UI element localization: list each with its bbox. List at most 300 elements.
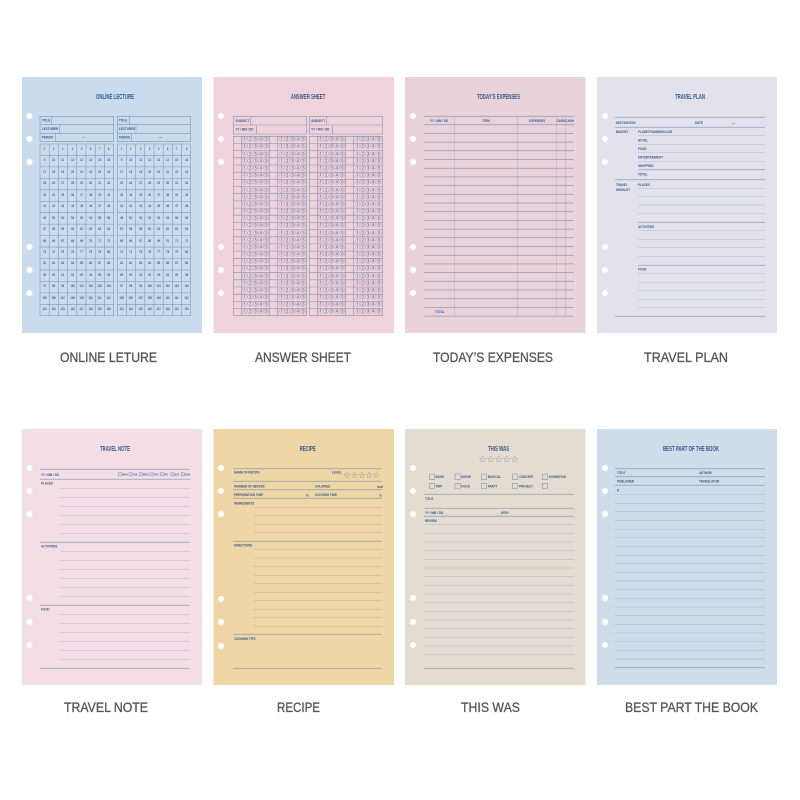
lecture grid: right: 90 <box>130 273 133 277</box>
lecture grid: right: 64 <box>185 227 188 231</box>
lecture grid: right: 29 <box>157 181 160 185</box>
lecture grid: right: 37 <box>157 193 160 197</box>
lecture grid: right: 51 <box>139 216 142 220</box>
answer bubbles: column 2 <box>279 136 307 316</box>
lecture grid: left: 107 <box>61 296 65 300</box>
lecture grid: right: 93 <box>157 273 160 277</box>
lecture grid: left: 5 <box>81 147 82 151</box>
lecture grid: left: 103 <box>98 284 102 288</box>
answer bubbles: column 3: ①②③④⑤ <box>318 193 345 201</box>
lecture grid: left: 2 <box>53 147 55 151</box>
lecture grid: left: 115 <box>61 307 65 311</box>
lecture grid: right: 26 <box>130 181 133 185</box>
answer bubbles: column 3: ①②③④⑤ <box>318 186 345 194</box>
answer bubbles: column 3: ①②③④⑤ <box>318 171 345 179</box>
lecture grid: left: 100 <box>70 284 74 288</box>
answer bubbles: column 1: ①②③④⑤ <box>242 307 269 315</box>
answer bubbles: column 4: ①②③④⑤ <box>355 286 382 294</box>
answer bubbles: column 1 <box>242 136 270 316</box>
plan labels: PLACES <box>638 182 651 187</box>
lecture grid: right <box>117 144 191 316</box>
lecture grid: right: 96 <box>185 273 188 277</box>
answer bubbles: column 2: ①②③④⑤ <box>279 207 306 215</box>
lecture grid: left: 93 <box>80 273 83 277</box>
lecture grid: right: 112 <box>184 296 188 300</box>
note labels <box>41 473 60 612</box>
answer bubbles: column 3: ①②③④⑤ <box>318 221 345 229</box>
lecture grid: right: 92 <box>148 273 151 277</box>
recipe labels: COOKING TIPS <box>234 637 256 641</box>
lecture grid: left: 80 <box>107 250 110 254</box>
lecture grid: left: 6 <box>90 147 91 151</box>
review labels: YY / MM / DD <box>425 511 444 515</box>
expense table <box>424 116 574 316</box>
recipe labels: PREPARATION TIME <box>234 493 264 497</box>
weekday checkboxes: TUE <box>133 472 138 477</box>
answer bubbles: column 2: ①②③④⑤ <box>279 229 306 237</box>
lecture grid: left: 17 <box>43 170 46 174</box>
recipe labels: CALORIES <box>315 484 331 489</box>
lecture grid: left: 25 <box>43 181 46 185</box>
lecture grid: left: 37 <box>80 193 83 197</box>
lecture grid: left: 55 <box>98 216 101 220</box>
panel: recipe <box>214 429 394 685</box>
answer bubbles: column 4: ①②③④⑤ <box>355 229 382 237</box>
plan labels: WISHLIST <box>616 188 630 192</box>
form header: right: — <box>159 135 163 140</box>
lecture grid: left: 53 <box>80 216 83 220</box>
lecture grid: right: 16 <box>185 158 188 162</box>
book labels: TITLE <box>617 471 626 475</box>
lecture grid: left: 75 <box>61 250 64 254</box>
answer bubbles: column 1: ①②③④⑤ <box>242 279 269 287</box>
lecture grid: right: 8 <box>185 147 187 151</box>
answer bubbles: column 2: ①②③④⑤ <box>279 164 306 172</box>
lecture grid: left: 26 <box>52 181 55 185</box>
lecture grid: left: 3 <box>62 147 64 151</box>
form header: left <box>40 116 114 141</box>
lecture grid: left: 34 <box>52 193 55 197</box>
caption: best part the book: BEST PART THE BOOK <box>625 700 758 715</box>
lecture grid: left: 108 <box>70 296 74 300</box>
category checkboxes: CONCERT <box>519 475 534 479</box>
answer bubbles: column 2: ①②③④⑤ <box>279 272 306 280</box>
lecture grid: left: 49 <box>43 216 46 220</box>
book labels: P. <box>617 488 620 493</box>
caption: today's expenses: TODAY’S EXPENSES <box>433 350 553 365</box>
answer bubbles: column 3: ①②③④⑤ <box>318 272 345 280</box>
form header: right: PERIOD <box>119 135 131 140</box>
lecture grid: right: 89 <box>120 273 123 277</box>
lecture grid: left: 109 <box>79 296 84 300</box>
lecture grid: left: 18 <box>52 170 55 174</box>
lecture grid: left: 106 <box>52 296 56 300</box>
plan labels: TOTAL <box>638 172 648 177</box>
review labels: TITLE <box>425 497 434 501</box>
lecture grid: left: 29 <box>80 181 83 185</box>
lecture grid: left: 33 <box>43 193 46 197</box>
panel: today's expenses <box>405 77 586 333</box>
answer bubbles: column 4: ①②③④⑤ <box>355 207 382 215</box>
lecture grid: right: 7 <box>176 147 178 151</box>
lecture grid: right: 101 <box>156 284 161 288</box>
note lines <box>40 469 190 668</box>
answer bubbles: column 4: ①②③④⑤ <box>355 157 382 165</box>
recipe labels: DIRECTIONS <box>234 543 253 548</box>
lecture grid: right: 72 <box>185 238 188 242</box>
lecture grid: left: 111 <box>98 296 102 300</box>
answer bubbles: column 1: ①②③④⑤ <box>242 178 269 186</box>
book labels: TRANSLATOR <box>699 479 720 484</box>
recipe labels: kcal <box>377 485 383 489</box>
heading: answer sheet: ANSWER SHEET <box>291 92 326 101</box>
panel: best part of the book <box>597 429 777 685</box>
lecture grid: left: 61 <box>80 227 83 231</box>
heading: travel note: TRAVEL NOTE <box>100 444 130 453</box>
lecture grid: left: 70 <box>89 238 92 242</box>
lecture grid: left <box>40 144 114 316</box>
category checkboxes: FOOD <box>461 484 470 489</box>
answer bubbles: column 1: ①②③④⑤ <box>242 221 269 229</box>
lecture grid: left: 113 <box>42 307 47 311</box>
answer bubbles: column 4: ①②③④⑤ <box>355 279 382 287</box>
weekday checkboxes: SUN <box>185 472 190 477</box>
plan labels: HOTEL <box>638 138 648 143</box>
lecture grid: right: 54 <box>166 216 169 220</box>
lecture grid: left: 110 <box>88 296 93 300</box>
panel: travel note <box>22 429 202 685</box>
answer bubbles: column 4: ①②③④⑤ <box>355 236 382 244</box>
lecture grid: right: 63 <box>176 227 178 231</box>
answer bubbles: column 1: ①②③④⑤ <box>242 257 269 265</box>
lecture grid: left: 21 <box>80 170 83 174</box>
lecture grid: left: 22 <box>89 170 92 174</box>
recipe labels: NAME OF RECIPE <box>234 470 260 475</box>
answer bubbles: column 2: ①②③④⑤ <box>279 200 306 208</box>
lecture grid: left: 92 <box>71 273 74 277</box>
lecture grid: left: 7 <box>99 147 100 151</box>
form header: subject and date <box>234 116 383 134</box>
lecture grid: left: 44 <box>71 204 74 208</box>
answer bubbles: column 3: ①②③④⑤ <box>318 207 345 215</box>
lecture grid: right: 117 <box>157 307 161 311</box>
plan labels: PLANE/TRAIN/BUS/CAR <box>638 130 673 134</box>
lecture grid: left: 16 <box>107 158 110 162</box>
answer bubbles: column 4: ①②③④⑤ <box>355 178 382 186</box>
lecture grid: right: 1 <box>121 147 123 151</box>
lecture grid: right: 45 <box>157 204 160 208</box>
category checkboxes <box>429 474 566 489</box>
expense table: YY / MM / DD <box>430 118 449 123</box>
category checkboxes: MUSICAL <box>488 475 501 479</box>
note labels: FOOD <box>41 607 50 612</box>
caption: recipe: RECIPE <box>277 700 320 715</box>
panel: travel plan <box>597 77 777 333</box>
lecture grid: left: 118 <box>88 307 93 311</box>
lecture grid: left: 58 <box>52 227 55 231</box>
lecture grid: right: 109 <box>156 296 161 300</box>
recipe labels <box>234 470 383 641</box>
lecture grid: left: 19 <box>61 170 64 174</box>
lecture grid: left: 72 <box>107 238 110 242</box>
lecture grid: right: 49 <box>120 216 123 220</box>
answer bubbles: column 3: ①②③④⑤ <box>318 300 345 308</box>
lecture grid: right: 14 <box>166 158 169 162</box>
caption: online leture: ONLINE LETURE <box>60 350 157 365</box>
lecture grid: right: 50 <box>130 216 133 220</box>
form header: right <box>117 116 191 141</box>
lecture grid: left: 60 <box>71 227 74 231</box>
lecture grid: left: 50 <box>52 216 55 220</box>
answer bubbles: column 2: ①②③④⑤ <box>279 236 306 244</box>
lecture grid: left: 30 <box>89 181 92 185</box>
lecture grid: right: 68 <box>148 238 151 242</box>
plan labels: BUDGET <box>616 130 628 134</box>
lecture grid: right: 80 <box>185 250 188 254</box>
answer bubbles: column 3: ①②③④⑤ <box>318 178 345 186</box>
category checkboxes: PARTY <box>488 484 498 489</box>
answer bubbles: column 2: ①②③④⑤ <box>279 264 306 272</box>
lecture grid: left: 56 <box>107 216 110 220</box>
answer bubbles: column 1: ①②③④⑤ <box>242 229 269 237</box>
answer bubbles: column 4: ①②③④⑤ <box>355 193 382 201</box>
lecture grid: right: 27 <box>139 181 142 185</box>
lecture grid: right: 9 <box>121 158 123 162</box>
answer bubbles: column 3: ①②③④⑤ <box>318 307 345 315</box>
lecture grid: left: 97 <box>43 284 46 288</box>
lecture grid: right: 58 <box>130 227 133 231</box>
caption: answer sheet: ANSWER SHEET <box>255 350 351 365</box>
lecture grid: left: 120 <box>107 307 111 311</box>
lecture grid: right: 86 <box>166 261 169 265</box>
plan labels: SHOPPING <box>638 164 654 168</box>
recipe lines <box>233 469 382 668</box>
plan labels <box>616 121 736 272</box>
review labels: WITH <box>501 511 509 515</box>
panel: this was <box>405 429 586 685</box>
lecture grid: left: 14 <box>89 158 92 162</box>
lecture grid: left: 15 <box>98 158 101 162</box>
lecture grid: right: 56 <box>185 216 188 220</box>
lecture grid: right: 35 <box>139 193 142 197</box>
answer bubbles: column 2: ①②③④⑤ <box>279 142 306 150</box>
lecture grid: right: 91 <box>139 273 142 277</box>
lecture grid: right: 97 <box>120 284 123 288</box>
lecture grid: left: 28 <box>71 181 74 185</box>
answer bubbles: column 3: ①②③④⑤ <box>318 243 345 251</box>
form header: subject and date: YY / MM / DD <box>235 127 254 132</box>
answer bubbles: column 1: ①②③④⑤ <box>242 150 269 158</box>
answer bubbles: column 2: ①②③④⑤ <box>279 250 306 258</box>
lecture grid: right: 85 <box>157 261 160 265</box>
lecture grid: left: 89 <box>43 273 46 277</box>
lecture grid: left: 54 <box>89 216 92 220</box>
lecture grid: left: 86 <box>89 261 92 265</box>
answer bubbles: column 3: ①②③④⑤ <box>318 264 345 272</box>
form header: subject and date: YY / MM / DD <box>311 127 330 132</box>
lecture grid: right: 48 <box>185 204 188 208</box>
form header: left: PERIOD <box>42 135 54 140</box>
lecture grid: left: 90 <box>52 273 55 277</box>
answer bubbles: column 1: ①②③④⑤ <box>242 272 269 280</box>
plan labels: FOOD <box>638 147 647 151</box>
lecture grid: right: 3 <box>140 147 141 151</box>
answer bubbles: column 4: ①②③④⑤ <box>355 307 382 315</box>
panel: online lecture <box>22 77 202 333</box>
rating stars: ☆☆☆☆☆ <box>478 454 519 466</box>
lecture grid: right: 20 <box>148 170 151 174</box>
caption: this was: THIS WAS <box>461 700 520 715</box>
lecture grid: right: 22 <box>166 170 169 174</box>
book labels <box>617 471 720 493</box>
lecture grid: left: 96 <box>107 273 110 277</box>
expense table: ITEM <box>482 118 490 123</box>
review labels <box>425 497 509 523</box>
lecture grid: right: 4 <box>149 147 150 151</box>
answer bubbles: column 2: ①②③④⑤ <box>279 243 306 251</box>
lecture grid: right: 75 <box>139 250 142 254</box>
form header: left: LECTURER <box>42 126 59 131</box>
lecture grid: right: 113 <box>120 307 124 311</box>
lecture grid: right: 67 <box>139 238 142 242</box>
category checkboxes: MOVIE <box>461 475 471 479</box>
answer bubbles: column 2: ①②③④⑤ <box>279 257 306 265</box>
lecture grid: right: 74 <box>130 250 133 254</box>
lecture grid: left: 23 <box>98 170 101 174</box>
answer bubbles: column 3 <box>318 136 346 316</box>
lecture grid: right: 116 <box>147 307 152 311</box>
answer bubbles: column 3: ①②③④⑤ <box>318 150 345 158</box>
note labels: ACTIVITIES <box>41 544 58 549</box>
lecture grid: right: 36 <box>148 193 151 197</box>
category checkboxes: PROJECT <box>519 484 533 489</box>
answer bubbles: column 3: ①②③④⑤ <box>318 286 345 294</box>
lecture grid: right: 103 <box>175 284 179 288</box>
lecture grid: right: 99 <box>139 284 142 288</box>
level stars: ☆☆☆☆☆ <box>343 471 380 481</box>
lecture grid: left: 65 <box>43 238 46 242</box>
lecture grid: left: 104 <box>107 284 111 288</box>
answer grid lines <box>233 136 383 316</box>
lecture grid: left: 88 <box>107 261 110 265</box>
lecture grid: left: 9 <box>44 158 45 162</box>
lecture grid: left: 63 <box>98 227 101 231</box>
lecture grid: left: 39 <box>98 193 101 197</box>
answer bubbles: column 4: ①②③④⑤ <box>355 214 382 222</box>
lecture grid: right: 2 <box>130 147 132 151</box>
lecture grid: right: 39 <box>176 193 178 197</box>
lecture grid: right: 31 <box>176 181 178 185</box>
answer bubbles: column 4: ①②③④⑤ <box>355 272 382 280</box>
lecture grid: right: 34 <box>130 193 133 197</box>
lecture grid: right: 33 <box>120 193 123 197</box>
lecture grid: right: 100 <box>147 284 152 288</box>
lecture grid: left: 102 <box>88 284 93 288</box>
lecture grid: left: 46 <box>89 204 92 208</box>
lecture grid: right: 66 <box>130 238 133 242</box>
weekday checkboxes: MON <box>122 472 128 477</box>
lecture grid: left: 77 <box>80 250 83 254</box>
lecture grid: left: 45 <box>80 204 83 208</box>
lecture grid: right: 46 <box>166 204 169 208</box>
lecture grid: left: 95 <box>98 273 101 277</box>
answer bubbles: column 2: ①②③④⑤ <box>279 186 306 194</box>
lecture grid: right: 60 <box>148 227 151 231</box>
lecture grid: right: 24 <box>185 170 188 174</box>
expense table: EXPENSES <box>529 118 546 123</box>
answer bubbles: column 1: ①②③④⑤ <box>242 200 269 208</box>
lecture grid: right: 111 <box>175 296 179 300</box>
answer bubbles: column 2: ①②③④⑤ <box>279 193 306 201</box>
answer bubbles: column 4 <box>355 136 383 316</box>
lecture grid: left: 48 <box>107 204 110 208</box>
form header: right: LECTURER <box>119 126 136 131</box>
answer bubbles: column 3: ①②③④⑤ <box>318 200 345 208</box>
form header: left: TITLE <box>42 118 51 123</box>
lecture grid: right: 6 <box>167 147 169 151</box>
lecture grid: right: 62 <box>166 227 169 231</box>
lecture grid: left: 20 <box>71 170 74 174</box>
lecture grid: left: 83 <box>61 261 64 265</box>
answer bubbles: column 1: ①②③④⑤ <box>242 164 269 172</box>
answer bubbles: column 3: ①②③④⑤ <box>318 257 345 265</box>
lecture grid: left: 78 <box>89 250 92 254</box>
book labels: AUTHOR <box>699 471 712 475</box>
caption: travel note: TRAVEL NOTE <box>64 700 148 715</box>
lecture grid: left: 57 <box>43 227 46 231</box>
plan labels: TRAVEL <box>616 182 628 187</box>
recipe labels: LEVEL <box>332 470 342 475</box>
weekday checkboxes: SAT <box>175 472 180 477</box>
lecture grid: right: 44 <box>148 204 151 208</box>
answer bubbles: column 3: ①②③④⑤ <box>318 236 345 244</box>
lecture grid: left: 84 <box>71 261 74 265</box>
plan labels: DESTINATION <box>616 121 636 125</box>
lecture grid: right: 52 <box>148 216 151 220</box>
lecture grid: right: 21 <box>157 170 160 174</box>
plan lines <box>615 117 765 316</box>
answer bubbles: column 4: ①②③④⑤ <box>355 200 382 208</box>
plan labels: ENTERTAINMENT <box>638 155 663 160</box>
lecture grid: right: 43 <box>139 204 142 208</box>
lecture grid: right: 55 <box>176 216 178 220</box>
lecture grid: left: 105 <box>42 296 47 300</box>
heading: today's expenses: TODAY'S EXPENSES <box>477 92 520 101</box>
answer bubbles: column 4: ①②③④⑤ <box>355 257 382 265</box>
weekday checkboxes: THU <box>154 472 159 477</box>
lecture grid: left: 81 <box>43 261 46 265</box>
lecture grid: right: 70 <box>166 238 169 242</box>
answer bubbles: column 1: ①②③④⑤ <box>242 293 269 301</box>
lecture grid: right: 17 <box>120 170 123 174</box>
category checkboxes: BOOK <box>436 475 445 479</box>
lecture grid: left: 101 <box>79 284 84 288</box>
answer bubbles: column 1: ①②③④⑤ <box>242 142 269 150</box>
lecture grid: left: 85 <box>80 261 83 265</box>
expense table: TOTAL <box>435 310 445 314</box>
lecture grid: right: 38 <box>166 193 169 197</box>
lecture grid: left: 11 <box>62 158 64 162</box>
recipe labels: NUMBER OF SERVES <box>234 484 265 489</box>
weekday checkboxes: FRI <box>164 472 168 477</box>
lecture grid: right: 69 <box>157 238 160 242</box>
lecture grid: right: 84 <box>148 261 151 265</box>
lecture grid: left: 12 <box>71 158 74 162</box>
plan labels: — <box>732 121 736 125</box>
answer bubbles: column 3: ①②③④⑤ <box>318 229 345 237</box>
answer bubbles: column 3: ①②③④⑤ <box>318 214 345 222</box>
note labels: PLACES <box>41 481 54 486</box>
